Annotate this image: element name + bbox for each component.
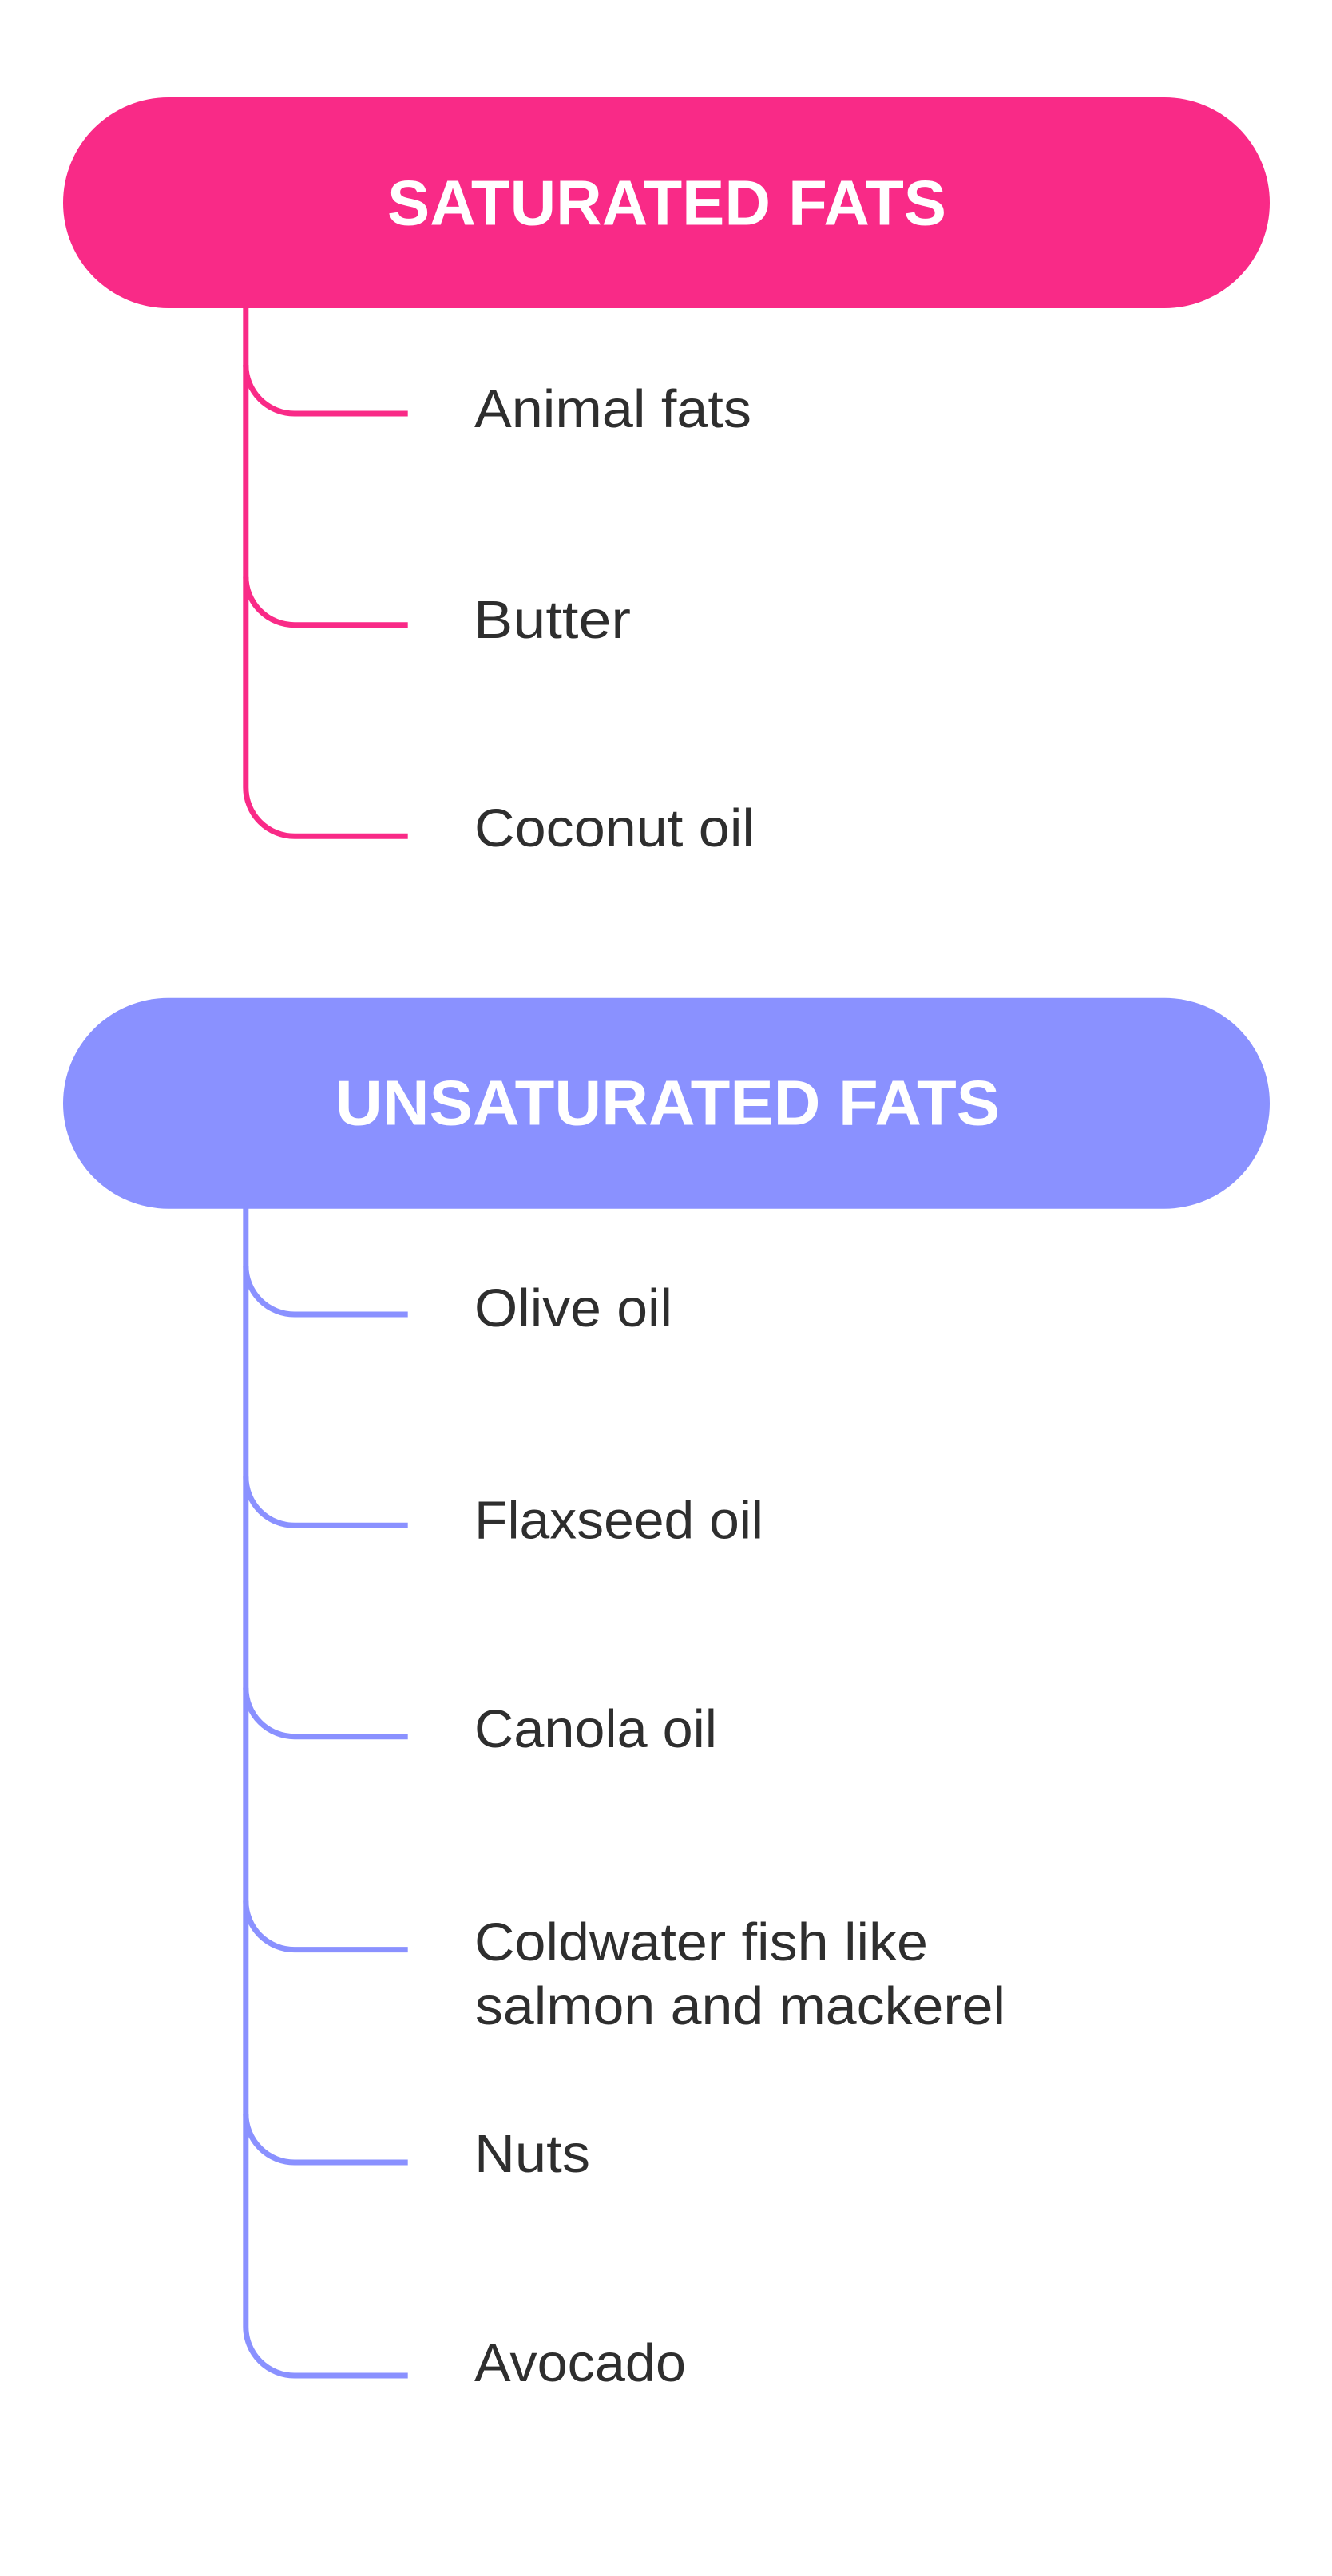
item: butter: Butter (474, 591, 631, 650)
heading pill: unsaturated fats (63, 998, 1270, 1209)
item: avocado: Avocado (474, 2334, 686, 2393)
item: coconut oil: Coconut oil (474, 799, 755, 858)
item: animal fats: Animal fats (474, 380, 751, 439)
connector tree: saturated fats (246, 307, 408, 836)
item: canola oil: Canola oil (474, 1700, 717, 1759)
panel: unsaturated fats (63, 998, 1270, 2393)
connector tree: unsaturated fats (246, 1208, 408, 2376)
heading pill: saturated fats (63, 97, 1270, 308)
item: coldwater fish (474, 1913, 1005, 2036)
item: coldwater fish: Coldwater fish like (474, 1913, 928, 1972)
heading pill: unsaturated fats: UNSATURATED FATS (335, 1067, 1000, 1139)
item: flaxseed oil: Flaxseed oil (474, 1492, 763, 1551)
item: olive oil: Olive oil (474, 1279, 672, 1338)
item: nuts: Nuts (474, 2125, 590, 2184)
panel: saturated fats (63, 97, 1270, 858)
item: coldwater fish: salmon and mackerel (475, 1977, 1005, 2036)
heading pill: saturated fats: SATURATED FATS (387, 168, 946, 238)
